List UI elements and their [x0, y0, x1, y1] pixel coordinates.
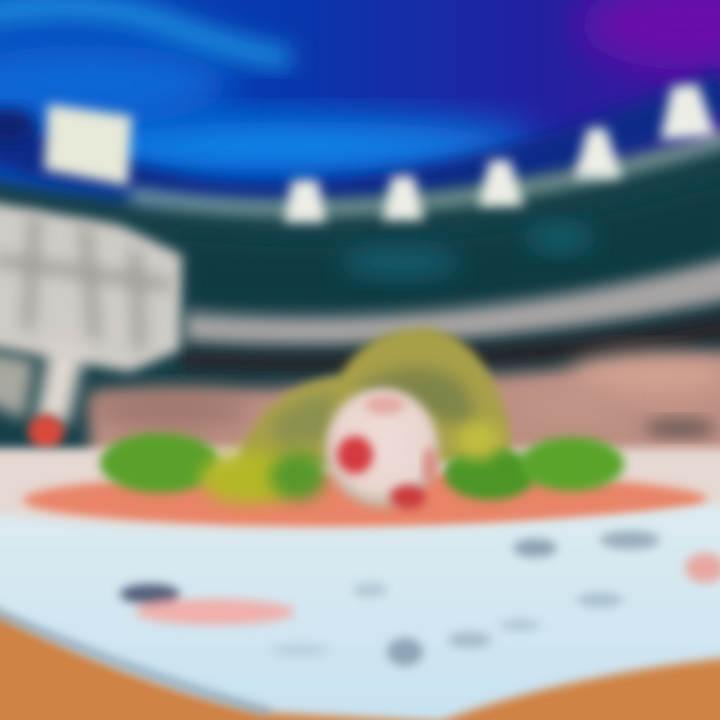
ground [0, 448, 720, 548]
scoreboard tower [0, 104, 182, 449]
orange ground bottom [0, 590, 720, 720]
stadium stands [0, 130, 720, 470]
smudged text on paper [120, 531, 720, 666]
sky [0, 0, 720, 300]
green mound [100, 328, 624, 504]
paper sheet [0, 500, 720, 720]
soccer ball [325, 388, 439, 509]
stadium lights [284, 84, 716, 222]
